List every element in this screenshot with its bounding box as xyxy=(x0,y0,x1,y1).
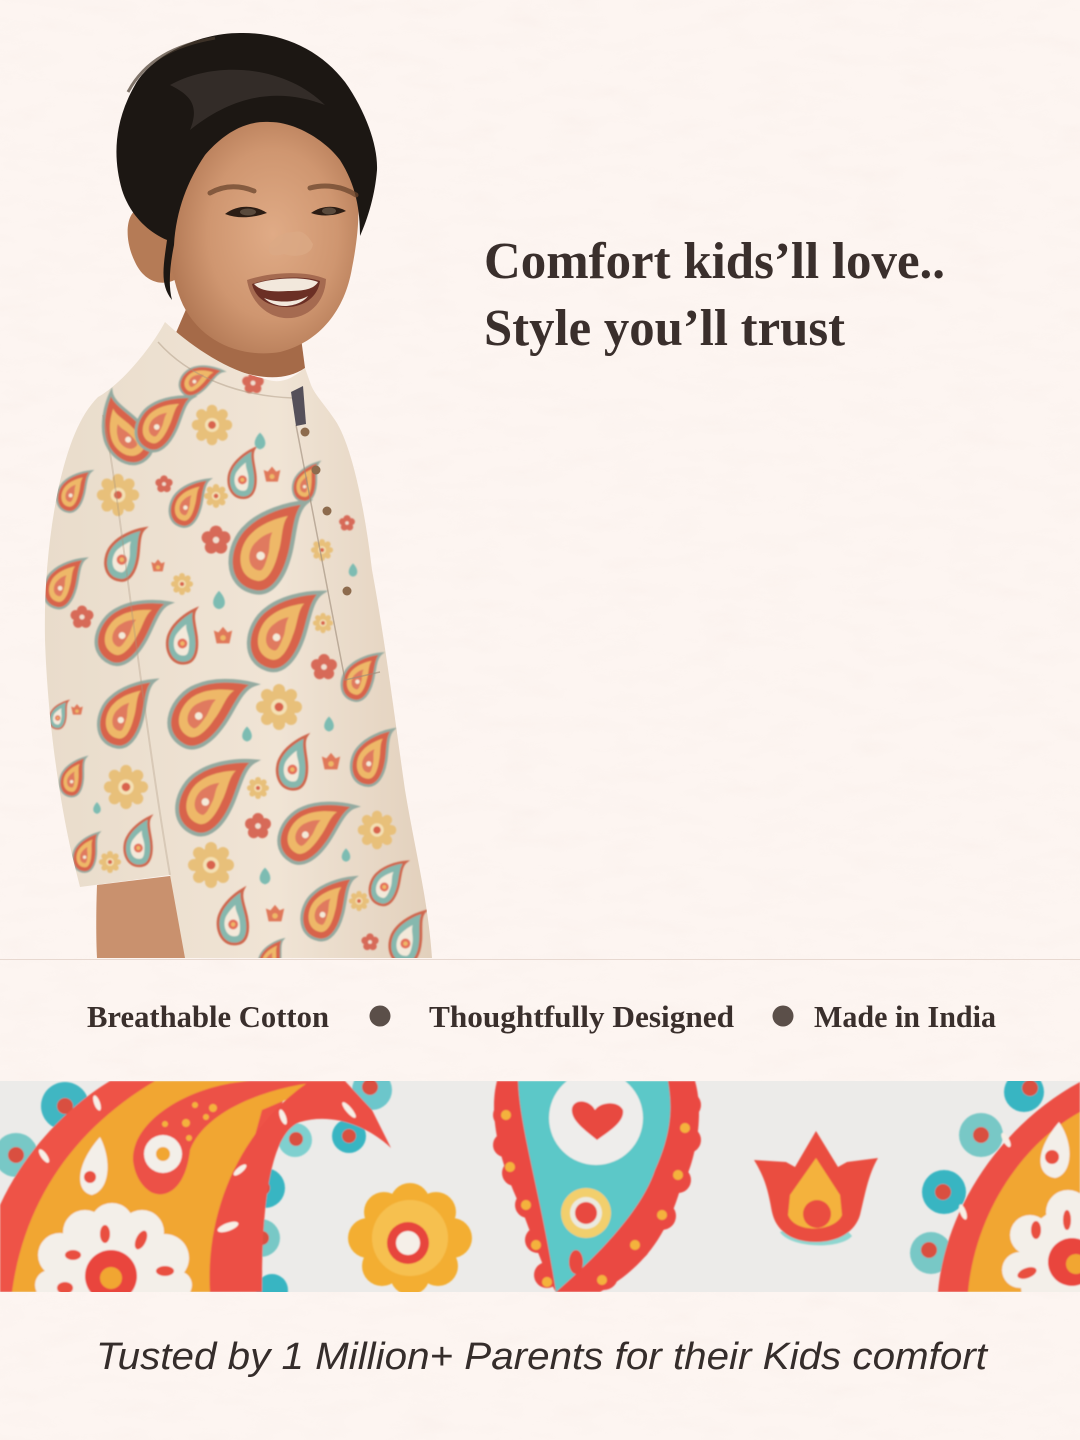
right paisley scallops xyxy=(910,1072,1044,1274)
neck xyxy=(175,300,305,377)
feature row: Breathable Cotton xyxy=(87,999,329,1034)
boy's hand xyxy=(96,875,200,958)
kurta buttons xyxy=(300,428,352,596)
central paisley xyxy=(493,1071,701,1292)
trust tagline: Tusted by 1 Million+ Parents for their Kids comfort xyxy=(96,1336,989,1378)
feature row: Made in India xyxy=(814,999,996,1034)
heading: Comfort kids’ll love.. xyxy=(484,233,945,290)
yellow flower xyxy=(348,1183,472,1295)
heading xyxy=(484,233,945,357)
nose xyxy=(269,231,313,256)
kurta with paisley print xyxy=(41,322,432,976)
tulip motif xyxy=(754,1131,878,1245)
eyes and brows xyxy=(210,186,356,217)
hair xyxy=(116,33,377,300)
face xyxy=(168,105,358,353)
fabric strip: paisley close-up xyxy=(0,1081,1080,1292)
large paisley left xyxy=(0,1081,391,1354)
ear xyxy=(128,207,178,283)
photo: smiling boy in paisley kurta xyxy=(41,33,432,976)
feature row: Thoughtfully Designed xyxy=(429,999,734,1034)
heading: Style you’ll trust xyxy=(484,300,846,357)
smile xyxy=(247,273,326,318)
large paisley right xyxy=(938,1082,1080,1310)
divider line above features xyxy=(0,958,1080,960)
teal scallops left paisley xyxy=(0,1070,392,1306)
feature row xyxy=(87,999,996,1034)
